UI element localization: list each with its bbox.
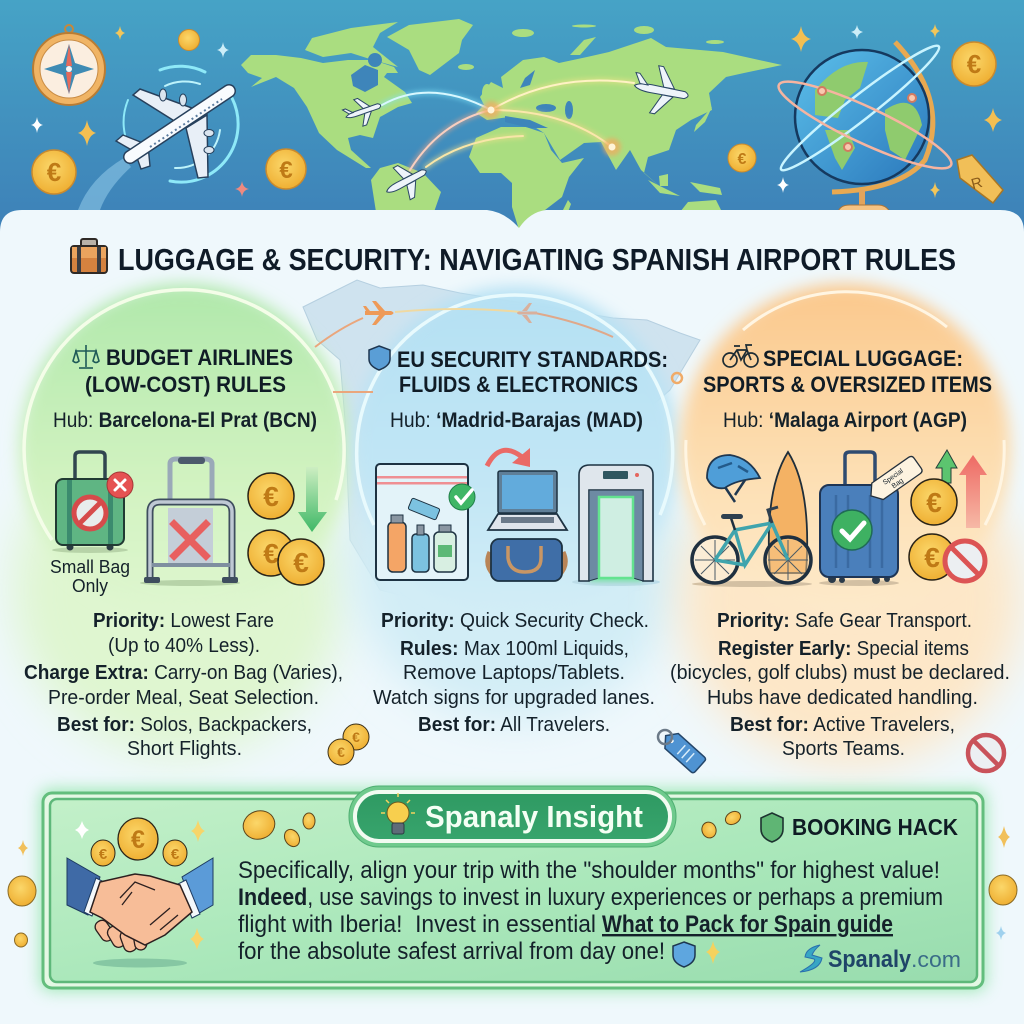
header banner: world travel scene (0, 0, 1024, 240)
icon: price tag (957, 155, 1003, 203)
details: (bicycles, golf clubs) must be declared. (670, 661, 1010, 684)
decorations between panels: € (337, 744, 345, 760)
hub: Hub: ‘Malaga Airport (AGP) (723, 409, 967, 432)
icon: coins with down arrow: € (263, 538, 279, 569)
icon: laptop (488, 471, 567, 530)
insight text: flight with Iberia! Invest in essential (238, 911, 596, 938)
icon: coins and no sign: € (926, 487, 942, 518)
details (670, 609, 1010, 760)
caption: small bag only (50, 557, 130, 596)
small plane: Americas (341, 92, 385, 131)
details: Rules: Max 100ml Liquids, (400, 637, 629, 660)
icon: coins with down arrow: € (293, 547, 309, 578)
booking hack label: BOOKING HACK (792, 814, 958, 840)
logo: spanaly.com: .com (911, 947, 961, 972)
icon: duffel bag (488, 539, 565, 581)
insight text: Indeed, use savings to invest in luxury experiences or perhaps a premium (238, 884, 943, 911)
heading (397, 347, 668, 397)
icon: suitcase (71, 239, 107, 273)
special bag tag (865, 455, 923, 504)
coins in header: € (967, 49, 981, 79)
panel: special luggage (670, 345, 1010, 760)
sparkles in header (31, 24, 1002, 198)
details: Best for: Solos, Backpackers, (57, 713, 312, 736)
caption: small bag only: Only (72, 576, 108, 596)
icon: scales (73, 345, 99, 368)
faint map of Spain (303, 280, 700, 605)
icon: compass (33, 25, 105, 105)
arrow: move laptop (487, 448, 530, 467)
coins in header (32, 30, 996, 194)
insight text: for the absolute safest arrival from day one! (238, 938, 665, 965)
tinted column halos (13, 425, 343, 755)
badge: spanaly insight: Spanaly Insight (425, 799, 643, 834)
icon: bicycle with wheels (692, 507, 812, 587)
badge: spanaly insight (349, 786, 676, 847)
details: Pre-order Meal, Seat Selection. (48, 686, 319, 709)
heading: SPECIAL LUGGAGE: (763, 346, 963, 371)
details: Remove Laptops/Tablets. (403, 661, 625, 684)
details: Best for: All Travelers. (418, 713, 610, 736)
heading (703, 346, 992, 397)
icon: shield (369, 346, 390, 370)
details: Priority: Quick Security Check. (381, 609, 649, 632)
logo: spanaly.com: Spanaly (828, 946, 912, 973)
caption: small bag only: Small Bag (50, 557, 130, 577)
insight text (238, 857, 943, 965)
details: Short Flights. (127, 737, 242, 760)
glow rings and large airplane (78, 66, 238, 210)
icon: blue suitcase (819, 452, 923, 586)
icon: small green bag (52, 452, 133, 553)
icon: handshake with coins: € (131, 826, 145, 854)
side decorations (8, 826, 1017, 947)
icon: globe on stand (771, 37, 959, 212)
logo: spanaly.com (800, 945, 961, 973)
no sign (968, 735, 1004, 771)
details (24, 609, 343, 760)
small plane: South America (378, 155, 434, 208)
icon: coins and no sign: € (924, 542, 940, 573)
panel: spanaly insight booking hack (40, 786, 986, 991)
icon: handshake with coins (67, 818, 213, 968)
coins in header: € (279, 157, 293, 184)
details: (Up to 40% Less). (108, 634, 260, 657)
heading: FLUIDS & ELECTRONICS (399, 372, 638, 397)
insight text: Specifically, align your trip with the "shoulder months" for highest value! (238, 857, 940, 884)
icon: surfboard (769, 452, 807, 573)
insight text: What to Pack for Spain guide (602, 911, 893, 938)
icon: handshake with coins: € (171, 846, 180, 863)
special bag tag: Bag (891, 477, 905, 490)
icon: helmet (707, 455, 760, 502)
icon: light bulb (381, 793, 415, 834)
special bag tag: Special (882, 468, 905, 487)
world map (241, 19, 782, 230)
main content panel (0, 210, 1024, 1024)
panel: budget airlines (24, 345, 343, 760)
panel: EU security standards (369, 346, 668, 736)
details: Hubs have dedicated handling. (707, 686, 978, 709)
heading: SPORTS & OVERSIZED ITEMS (703, 372, 992, 397)
blue luggage tag (659, 728, 707, 774)
details: Register Early: Special items (718, 637, 969, 660)
icon: bicycle (723, 345, 758, 367)
icon: baggage sizer with cross (140, 457, 240, 586)
hub: Hub: Barcelona-El Prat (BCN) (53, 409, 317, 432)
coins in header: € (47, 157, 61, 187)
heading: (LOW-COST) RULES (85, 372, 286, 397)
details (373, 609, 655, 736)
icon: security scanner (572, 465, 660, 586)
flight routes (382, 81, 634, 170)
small plane: Asia (629, 62, 693, 119)
icon: coins with down arrow (248, 467, 327, 585)
details: Watch signs for upgraded lanes. (373, 686, 655, 709)
flight path decoration over Spain (315, 301, 682, 392)
gold coins left of badge (239, 806, 743, 849)
icon: coins with down arrow: € (263, 481, 279, 512)
coins in header: € (738, 151, 747, 168)
heading: EU SECURITY STANDARDS: (397, 347, 668, 372)
heading (85, 345, 293, 397)
icon: fee arrows (936, 450, 987, 528)
icon: clear liquids bag (376, 464, 475, 580)
details: Priority: Safe Gear Transport. (717, 609, 972, 632)
icon: shield and sparkle (673, 941, 720, 967)
heading: BUDGET AIRLINES (106, 345, 293, 370)
icon: handshake with coins: € (99, 846, 108, 863)
details: Best for: Active Travelers, (730, 713, 955, 736)
details: Sports Teams. (782, 737, 905, 760)
hub: Hub: ‘Madrid-Barajas (MAD) (390, 409, 643, 432)
icon: price tag: R (969, 174, 984, 193)
decorations between panels: € (352, 729, 360, 745)
decorations between panels (328, 724, 1004, 774)
icon: coins and no sign (909, 479, 985, 581)
details: Charge Extra: Carry-on Bag (Varies), (24, 661, 343, 684)
details: Priority: Lowest Fare (93, 609, 274, 632)
